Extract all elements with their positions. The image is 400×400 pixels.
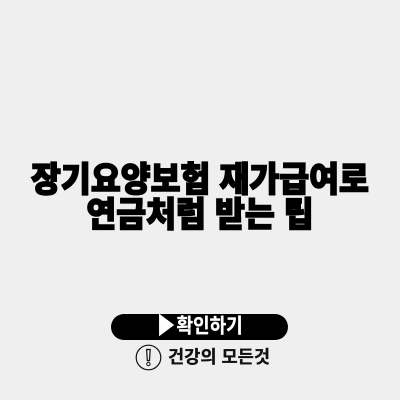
icon: exclamation circle: [136, 344, 162, 370]
button: confirm: ▶: [157, 313, 175, 339]
button: confirm: 확인하기: [176, 315, 243, 337]
title: 장기요양보험 재가급여로: [31, 161, 369, 199]
button: confirm: [111, 314, 288, 340]
title: [30, 161, 369, 234]
title: 연금처럼 받는 팁: [86, 196, 314, 234]
brand name: 건강의 모든것: [168, 347, 270, 367]
